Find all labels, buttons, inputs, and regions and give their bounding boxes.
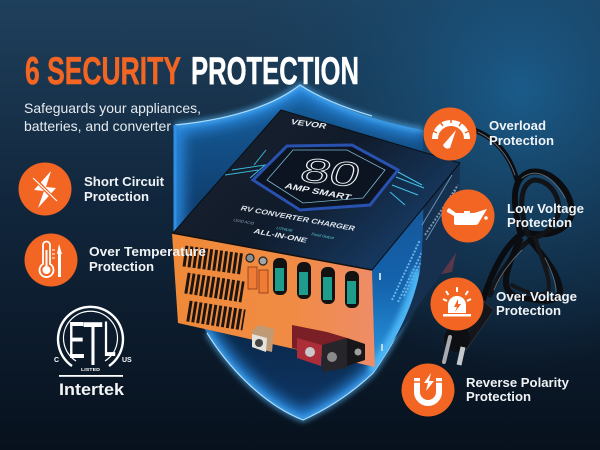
charger device [172,110,460,373]
feature: reverse polarity protection [402,364,569,416]
top face: ALL-IN-ONE [252,227,309,245]
label [89,245,206,274]
label: Protection [89,260,154,274]
ETL Intertek certification [54,307,132,399]
icon: alarm beacon [430,278,484,330]
feature: over voltage protection [430,278,577,330]
top face [173,110,460,270]
label: Protection [84,190,149,204]
icon: ETL ring: LISTED [81,367,101,372]
top face: AMP SMART [283,181,354,202]
label [489,119,554,148]
icon: oil can [442,190,494,242]
icon: ETL ring: L [103,311,116,367]
label: Protection [489,134,554,148]
feature: over temperature protection [24,234,206,286]
icon: magnet [402,364,454,416]
Intertek wordmark: Intertek [59,380,125,399]
fuses [273,258,359,308]
ventilation slots [184,256,244,320]
right face [372,163,460,373]
title: PROTECTION [191,50,359,93]
icon: ETL ring: E [68,312,85,370]
top face: LITHIUM [276,225,293,233]
icon: crossed lightning bolt [18,162,72,216]
shield [175,85,423,420]
feature: short circuit protection [18,162,165,216]
subtitle: batteries, and converter [24,118,171,134]
label: Over Voltage [496,290,577,304]
icon: thermometer with arrow [24,234,78,286]
title [25,50,359,93]
label [466,376,569,404]
label: Over Temperature [89,245,206,259]
front orange face [172,233,375,372]
label: Short Circuit [84,175,165,189]
icon: speedometer gauge [424,108,476,160]
label: Overload [489,119,546,133]
power cable and plug [444,130,572,365]
top face: 80 [296,150,366,194]
top face: RV CONVERTER CHARGER [239,204,358,233]
label: Protection [466,390,531,404]
label [84,175,165,204]
top face: Fixed Output [311,231,336,240]
top face: LEAD ACID [233,217,255,226]
top face: VEVOR [289,118,329,131]
label: Protection [507,216,572,230]
label: Reverse Polarity [466,376,569,390]
title: 6 SECURITY [25,50,181,93]
icon: ETL ring: T [83,310,103,379]
subtitle: Safeguards your appliances, [24,100,201,116]
label [496,290,577,318]
knobs and labels [246,254,268,293]
terminals [252,325,365,372]
label: Protection [496,304,561,318]
icon: ETL ring [54,307,132,379]
label: Low Voltage [507,202,584,216]
subtitle [24,100,201,134]
reflected terminals on background [430,244,458,276]
icon: ETL ring: US [122,357,132,364]
label [507,202,584,230]
icon: ETL ring: C [54,357,59,364]
feature: overload protection [424,108,554,160]
feature: low voltage protection [442,190,584,242]
